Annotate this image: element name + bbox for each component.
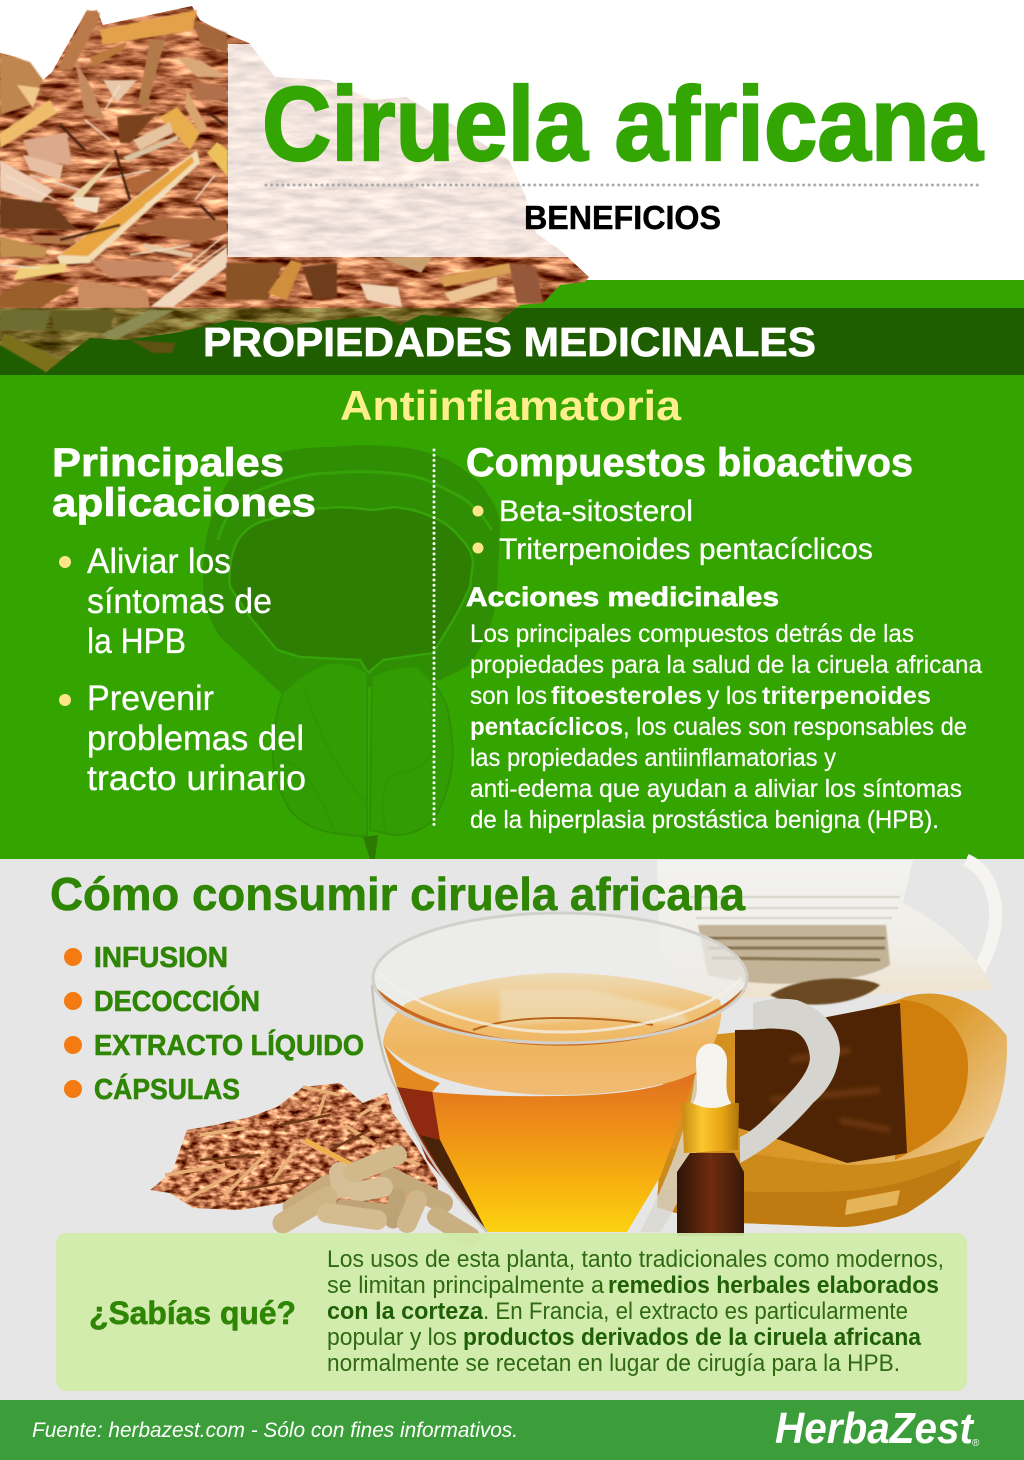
heading [52, 441, 316, 525]
item: decoction: DECOCCIÓN [94, 984, 260, 1018]
callout heading: ¿Sabías qué? [89, 1295, 296, 1331]
column divider [432, 450, 436, 828]
heading: Principales [52, 441, 284, 485]
illustration: small bark pile [150, 1083, 440, 1210]
bullet: relieve symptoms: síntomas de [87, 582, 272, 621]
cup handle [740, 999, 840, 1163]
right prostate lobe [370, 666, 453, 835]
paragraph: medicinal actions: , los cuales son responsables de [623, 713, 967, 741]
glass wall and base [640, 1070, 715, 1232]
dark infusion [735, 1003, 907, 1163]
left liquid band [383, 1043, 440, 1092]
footer logo: ® [972, 1438, 980, 1449]
illustration: glass teapot [650, 860, 1010, 1232]
bullet: prevent urinary problems: Prevenir [87, 679, 214, 718]
illustration: dropper bottle [677, 1044, 744, 1236]
bullet: prevent urinary problems: problemas del [87, 719, 304, 758]
bladder lumen [229, 507, 473, 673]
paragraph: medicinal actions: triterpenoides [762, 682, 931, 710]
heading: aplicaciones [52, 481, 316, 525]
translucent title panel [228, 44, 1024, 257]
paragraph: medicinal actions [470, 620, 982, 834]
illustration: capsules [283, 1155, 470, 1237]
bulb [692, 1044, 732, 1108]
gray consumption panel background [0, 859, 1024, 1400]
dark tea edge [397, 1087, 487, 1232]
dotted divider [266, 184, 982, 186]
amber bottle [677, 1153, 744, 1236]
paragraph: medicinal actions: y los [707, 682, 757, 710]
item: infusion: INFUSION [94, 942, 228, 974]
banner wash over bark [0, 308, 1024, 375]
paragraph: medicinal actions: Los principales compuestos detrás de las [470, 620, 914, 648]
illustration: tea cup [372, 913, 840, 1232]
item: liquid extract: EXTRACTO LÍQUIDO [94, 1028, 364, 1062]
tea body [397, 1073, 695, 1232]
gold collar [682, 1103, 739, 1153]
subheading: Acciones medicinales [466, 582, 779, 612]
compound list: Triterpenoides pentacíclicos [499, 533, 873, 566]
tea leaves in strainer [770, 978, 880, 1005]
lobe divisions [277, 690, 435, 833]
right column: bioactive compounds [466, 441, 982, 834]
illustration: prostate and bladder watermark [203, 445, 500, 859]
green properties panel background [0, 280, 1024, 859]
paragraph: medicinal actions: las propiedades antiinflamatorias y [470, 744, 836, 772]
cup rim [376, 990, 744, 1044]
bullet: prevent urinary problems: tracto urinario [87, 759, 306, 798]
tea [650, 994, 1010, 1232]
callout text: Los usos de esta planta, tanto tradicionales como modernos, [327, 1246, 944, 1273]
strainer mesh [698, 925, 890, 984]
left prostate lobe [273, 663, 367, 837]
section heading: how to consume: Cómo consumir ciruela africana [50, 868, 745, 920]
bullet: relieve symptoms [59, 542, 272, 661]
footer bar background [0, 1400, 1024, 1460]
item: capsules: CÁPSULAS [94, 1072, 240, 1106]
list: consumption forms [64, 942, 364, 1106]
teapot liquid [650, 994, 1010, 1232]
bullet: prevent urinary problems [59, 679, 306, 798]
bottom band [658, 1136, 985, 1227]
bladder inner ridge [218, 472, 492, 540]
paragraph: medicinal actions: propiedades para la salud de la ciruela africana [470, 651, 982, 679]
banner heading: PROPIEDADES MEDICINALES [203, 319, 816, 365]
subtitle: BENEFICIOS [524, 199, 721, 236]
callout text: normalmente se recetan en lugar de cirugía para la HPB. [327, 1350, 900, 1377]
teapot handle [966, 860, 996, 972]
callout text: productos derivados de la ciruela africana [463, 1324, 921, 1351]
compound list: Beta-sitosterol [499, 495, 693, 528]
callout panel [56, 1233, 967, 1391]
callout text: se limitan principalmente a [327, 1272, 604, 1299]
paragraph: medicinal actions: de la hiperplasia prostástica benigna (HPB). [470, 806, 939, 834]
callout background [56, 1233, 967, 1391]
bullet: relieve symptoms: Aliviar los [87, 542, 231, 581]
surface reflection [500, 990, 690, 1025]
compound list [472, 495, 873, 566]
callout text: remedios herbales elaborados [608, 1272, 939, 1299]
paragraph: medicinal actions: son los [470, 682, 547, 710]
urethra [363, 835, 378, 859]
amber tea area [895, 1000, 968, 1160]
teapot neck and glass shoulder [657, 860, 993, 1000]
callout text: . En Francia, el extracto es particularmente [483, 1298, 908, 1325]
callout text: con la corteza [327, 1298, 483, 1325]
paragraph: medicinal actions: anti-edema que ayudan a aliviar los síntomas [470, 775, 962, 803]
illustration: bark pile header [0, 6, 589, 372]
footer logo: HerbaZest [775, 1404, 975, 1453]
bullet: relieve symptoms: la HPB [87, 622, 186, 661]
property name: Antiinflamatoria [340, 382, 682, 429]
bladder outer wall [203, 445, 500, 695]
tea surface [383, 973, 721, 1095]
paragraph: medicinal actions: pentacíclicos [470, 713, 623, 741]
paragraph: medicinal actions: fitoesteroles [551, 682, 702, 710]
glass cup interior [372, 913, 748, 1043]
callout text [327, 1246, 944, 1377]
dark green banner band [0, 308, 1024, 375]
footer source text: Fuente: herbazest.com - Sólo con fines informativos. [32, 1419, 518, 1442]
white header background [0, 0, 1024, 280]
left column: main applications [52, 441, 316, 798]
callout text: popular y los [327, 1324, 457, 1351]
heading: Compuestos bioactivos [466, 441, 913, 485]
